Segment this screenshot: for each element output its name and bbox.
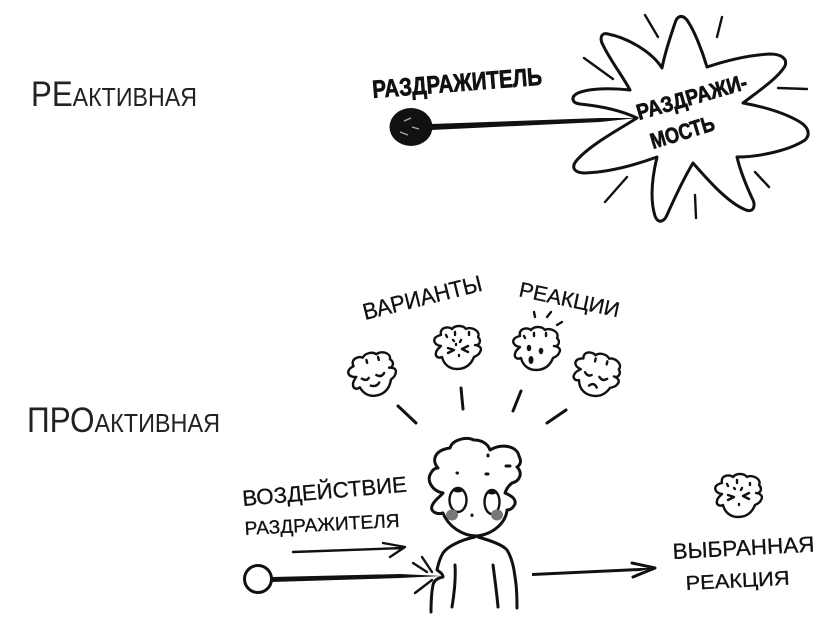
arrow: impact direction [293, 543, 405, 557]
label: reaction options, word 2: РЕАКЦИИ [517, 278, 622, 322]
person [429, 438, 520, 612]
label: chosen reaction, line 2: РЕАКЦИЯ [685, 568, 790, 595]
icon: calm face [345, 348, 401, 401]
stimulus arrow: open circle with line [244, 566, 442, 592]
person: body [431, 537, 517, 612]
heading: proactive: ПРОАКТИВНАЯ [27, 401, 220, 440]
label: stimulus: РАЗДРАЖИТЕЛЬ [371, 63, 543, 104]
person: cheeks [446, 510, 503, 520]
icon: surprised face [513, 327, 560, 370]
label: chosen reaction, line 1: ВЫБРАННАЯ [672, 532, 815, 564]
person: nose and hair dots [457, 455, 510, 516]
icon: surprise sparks [534, 312, 562, 325]
label: stimulus impact, line 2: РАЗДРАЖИТЕЛЯ [244, 511, 400, 540]
rays from person to options [398, 388, 566, 423]
explosion: irritability burst [573, 15, 808, 221]
icon: sad face [569, 348, 624, 401]
label: irritability, line 2: МОСТЬ [647, 111, 718, 154]
person: hair and face outline [429, 438, 520, 536]
label: stimulus impact, line 1: ВОЗДЕЙСТВИЕ [241, 472, 408, 511]
label: irritability, line 1: РАЗДРАЖИ- [633, 69, 750, 125]
stimulus arrow: black dot with line [390, 108, 637, 146]
heading: reactive: РЕАКТИВНАЯ [31, 75, 197, 114]
sparks around burst [584, 15, 807, 218]
icon: chosen reaction face [715, 474, 762, 517]
label: reaction options, word 1: ВАРИАНТЫ [360, 270, 485, 325]
icon: squinting face [434, 326, 481, 369]
arrow: to chosen reaction [532, 563, 655, 577]
impact sparks [413, 557, 432, 593]
person: eyes [450, 488, 500, 514]
